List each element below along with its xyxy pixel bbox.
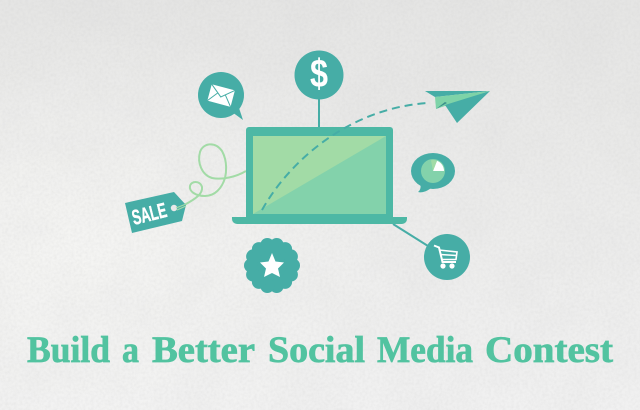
connector: dollar to laptop	[318, 98, 320, 128]
icon: shopping cart bubble	[424, 234, 470, 280]
icon: dollar bubble: $	[310, 52, 328, 96]
title: Social	[268, 330, 365, 371]
connector: laptop to cart	[393, 224, 428, 246]
title: Contest	[485, 330, 614, 371]
string connecting tag to laptop	[177, 144, 246, 208]
star	[260, 253, 284, 277]
icon: sale tag	[125, 192, 186, 233]
laptop frame	[246, 127, 393, 218]
screen diagonal shade	[253, 136, 386, 214]
title: Build	[27, 330, 110, 371]
title: a	[122, 330, 139, 371]
icon: mail bubble	[198, 72, 244, 120]
dashed flight path	[262, 103, 428, 210]
envelope	[207, 84, 235, 107]
laptop	[232, 127, 407, 224]
icon: dollar bubble	[294, 50, 344, 100]
title: Media	[377, 330, 473, 371]
laptop base	[232, 217, 407, 224]
laptop screen	[253, 136, 386, 214]
sale label: SALE	[130, 199, 169, 230]
title: Better	[152, 330, 255, 371]
icon: star badge	[244, 238, 300, 293]
title	[27, 330, 614, 371]
icon: pie chart bubble	[411, 153, 455, 192]
icon: paper airplane	[425, 91, 490, 123]
